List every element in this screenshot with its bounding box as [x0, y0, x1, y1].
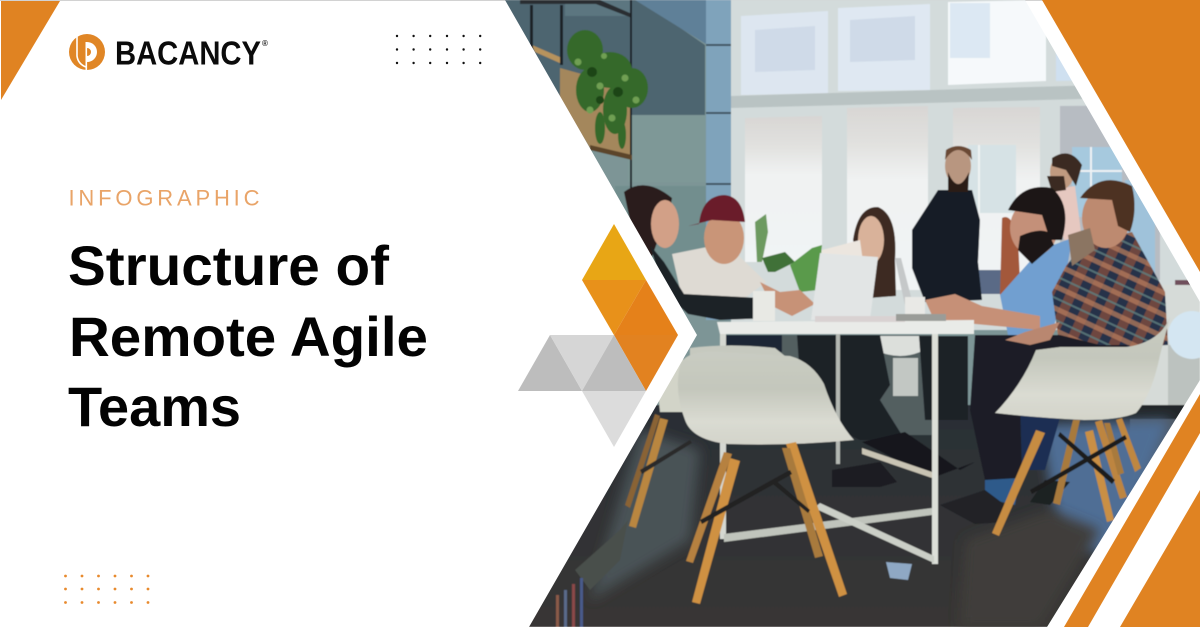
indoor plant behind table — [755, 214, 822, 292]
woman's dark arm across table — [652, 248, 754, 321]
orange dot grid — [64, 575, 149, 604]
top hairline — [0, 0, 1200, 1]
photo: team meeting around a table — [500, 0, 1200, 627]
eyebrow label: INFOGRAPHIC — [68, 186, 260, 210]
white chair behind table — [878, 336, 922, 356]
man in white t-shirt and red cap — [672, 195, 766, 298]
photo background wall — [580, 30, 1128, 406]
logo wordmark: BACANCY — [115, 34, 261, 72]
floor reflections — [556, 420, 1170, 627]
open laptop — [811, 253, 878, 320]
right low wall and radiator — [1142, 284, 1200, 406]
girl behind bearded man — [1000, 217, 1020, 295]
back wall visible under table — [780, 334, 932, 436]
right white chair — [992, 317, 1170, 536]
right orange panel — [1042, 0, 1200, 272]
logo icon — [69, 34, 105, 70]
title — [68, 234, 428, 438]
black dot grid — [396, 35, 481, 64]
woman on left — [624, 185, 679, 268]
back-left chair — [625, 352, 692, 528]
lower right orange strip — [1064, 394, 1200, 627]
man in plaid shirt — [1052, 180, 1168, 350]
front-left white chair — [678, 346, 854, 604]
man with glasses in back — [1047, 153, 1082, 240]
grey triangles — [518, 335, 646, 447]
lower window panes — [744, 106, 1190, 294]
table — [717, 314, 974, 564]
title: Structure of — [68, 234, 389, 297]
title: Teams — [68, 375, 241, 438]
man with beard in blue shirt — [925, 187, 1072, 345]
lower right orange corner — [1120, 490, 1200, 627]
windows frame — [731, 0, 1200, 330]
standing man in black sweater — [912, 146, 982, 302]
logo: Bacancy — [69, 34, 268, 72]
shelf and plant — [520, 0, 648, 196]
floor — [529, 404, 1130, 627]
triangle mosaic — [518, 224, 678, 447]
girl with laptop — [815, 207, 896, 300]
top-left orange triangle — [1, 1, 60, 100]
orange triangles — [582, 224, 678, 391]
registered mark: ® — [262, 39, 268, 48]
title: Remote Agile — [69, 305, 428, 368]
upper window panes — [741, 0, 1100, 95]
dark legs under table — [726, 322, 1130, 524]
man's hand and mug — [753, 282, 815, 321]
